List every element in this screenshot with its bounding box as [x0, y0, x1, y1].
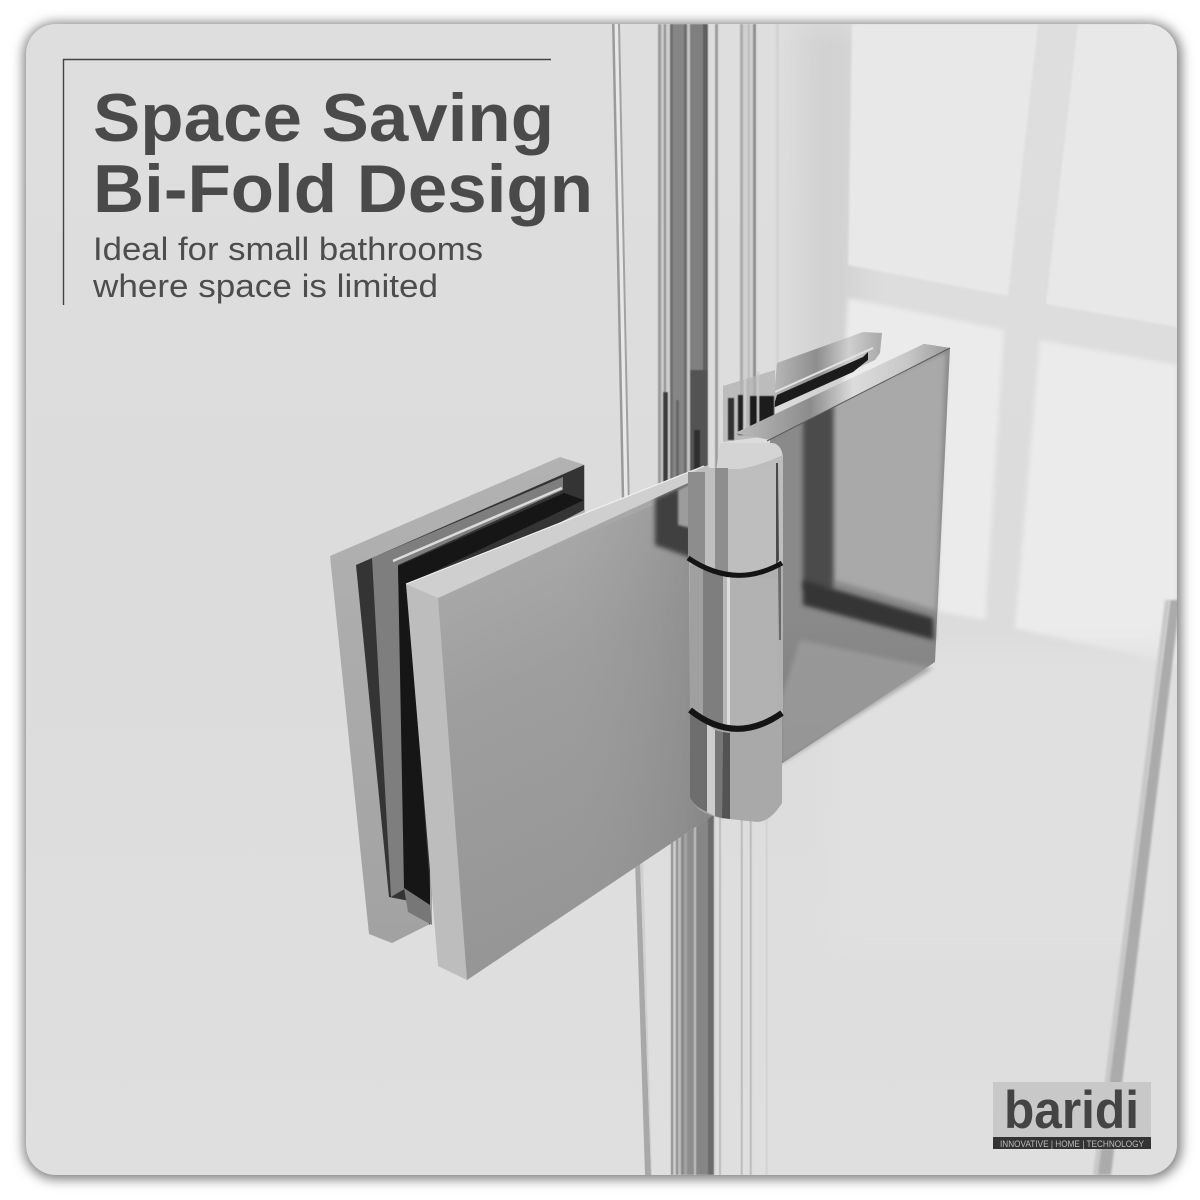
glass rods and door edges	[612, 24, 1180, 1175]
title	[93, 80, 593, 227]
hinge: right plate	[735, 344, 950, 764]
subtitle	[92, 231, 483, 304]
logo wordmark: baridi	[1004, 1081, 1139, 1140]
hinge: back left clamp	[330, 457, 585, 943]
hinge: front plate	[406, 465, 712, 980]
subtitle: Ideal for small bathrooms	[93, 231, 483, 267]
barrel lower section	[690, 710, 782, 822]
title: Bi-Fold Design	[93, 151, 593, 227]
barrel top cap	[716, 443, 783, 469]
upper rod streaks	[658, 24, 779, 494]
title: Space Saving	[93, 80, 554, 156]
lower rod streaks	[671, 810, 768, 1175]
window reflection	[800, 24, 1177, 950]
logo tagline: INNOVATIVE | HOME | TECHNOLOGY	[1000, 1139, 1145, 1150]
hinge: barrel	[688, 443, 783, 822]
barrel middle section	[689, 560, 783, 731]
hinge: back right clamp	[723, 332, 882, 442]
subtitle: where space is limited	[92, 268, 438, 304]
title frame lines	[64, 60, 551, 305]
barrel upper section	[688, 455, 783, 578]
logo: baridi	[993, 1081, 1151, 1150]
